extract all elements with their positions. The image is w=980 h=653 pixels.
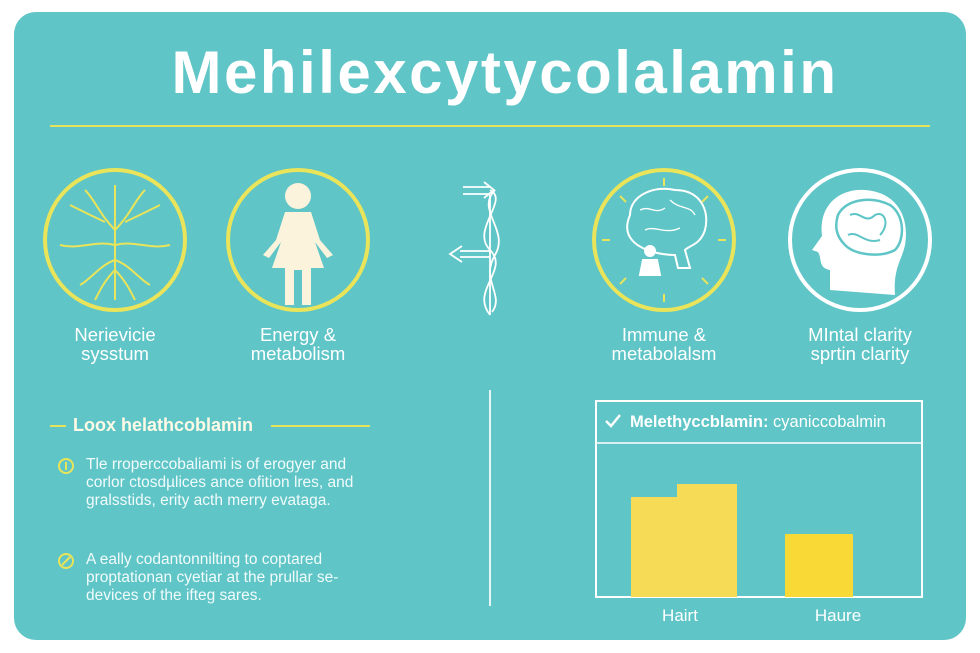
icon: person bbox=[228, 170, 368, 310]
icon: head with brain bbox=[790, 170, 930, 310]
label: nervous system: Nerievicie bbox=[74, 324, 156, 345]
icon: immune brain bbox=[594, 170, 734, 310]
label: mental clarity bbox=[808, 324, 912, 364]
icon: check bullet bbox=[59, 554, 73, 568]
label: energy: metabolism bbox=[251, 343, 345, 364]
label: mental clarity: MIntal clarity bbox=[808, 324, 912, 345]
icon: nervous system bbox=[45, 170, 185, 310]
chart label: Hairt: Hairt bbox=[662, 606, 698, 625]
text block 2: devices of the ifteg sares. bbox=[86, 587, 262, 604]
text block 2 bbox=[86, 551, 338, 604]
text block 2: proptationan cyetiar at the prullar se- bbox=[86, 569, 338, 586]
label: energy: Energy & bbox=[260, 324, 336, 345]
text block 1 bbox=[86, 456, 353, 509]
chart label: Haure: Haure bbox=[815, 606, 861, 625]
label: immune bbox=[612, 324, 716, 364]
text block 1: Tle rroperccobaliami is of erogyer and bbox=[86, 456, 346, 473]
label: nervous system bbox=[74, 324, 156, 364]
icon: dna arrows bbox=[450, 182, 499, 315]
label: mental clarity: sprtin clarity bbox=[811, 343, 909, 364]
heading: left section: Loox helathcoblamin bbox=[73, 415, 253, 435]
text block 1: corlor ctosdµlices ance ofition lres, and bbox=[86, 474, 353, 491]
text block 2: A eally codantonnilting to coptared bbox=[86, 551, 322, 568]
bar chart bbox=[596, 401, 922, 597]
label: energy bbox=[251, 324, 345, 364]
icon: info bullet bbox=[59, 459, 73, 473]
text block 1: gralsstids, erity acth merry evataga. bbox=[86, 492, 331, 509]
title: Mehilexcytycolalamin bbox=[172, 39, 838, 106]
label: immune: metabolalsm bbox=[612, 343, 716, 364]
chart header: Melethyccblamin: cyaniccobalmin bbox=[630, 413, 886, 431]
label: nervous system: sysstum bbox=[81, 343, 149, 364]
label: immune: Immune & bbox=[622, 324, 706, 345]
